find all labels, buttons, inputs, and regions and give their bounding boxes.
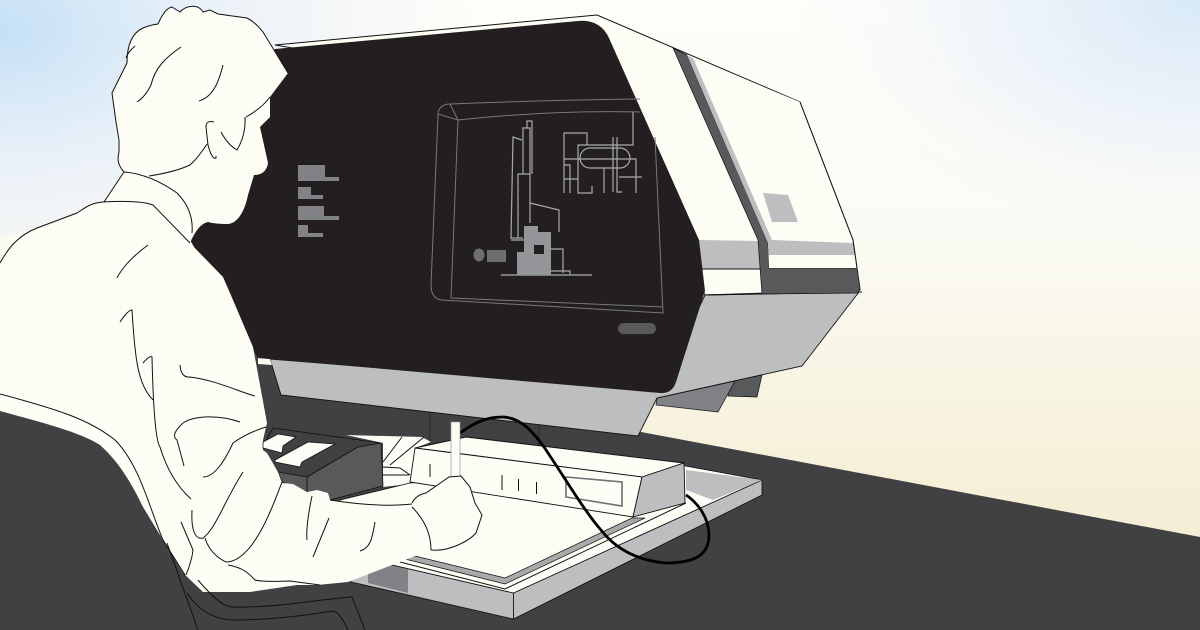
hand and cuff [412, 476, 482, 550]
indicator pill [618, 323, 656, 334]
vent square [763, 193, 798, 222]
tablet left face [340, 553, 514, 619]
outline head [112, 6, 288, 172]
stylus [451, 422, 460, 478]
silhouette [0, 6, 482, 592]
chair lines [187, 580, 365, 630]
tablet right face [514, 480, 762, 619]
behind shoulder [0, 231, 25, 263]
tablet top [340, 465, 762, 593]
housing underside [270, 292, 859, 436]
machine block [517, 226, 551, 275]
back edge and sleeve [0, 394, 198, 630]
pipework schematic [580, 148, 630, 168]
screen [190, 21, 705, 393]
arm outline [330, 500, 412, 505]
tablet rear grey corner [686, 470, 762, 500]
divider stripe [673, 48, 860, 294]
lower fins under monitor [656, 375, 762, 412]
key 2 [275, 442, 335, 467]
monitor stand column [430, 410, 539, 450]
monitor housing [258, 15, 862, 436]
tall schematic lines [511, 121, 559, 240]
white worksurface behind console [346, 435, 431, 487]
console tick marks [430, 464, 536, 494]
hair strands [126, 46, 270, 117]
shirt creases [117, 245, 375, 585]
console box [410, 437, 685, 517]
keyboard unit [262, 428, 383, 500]
digitizing tablet [340, 465, 762, 619]
band grey left [699, 240, 760, 269]
key 1 [263, 434, 296, 453]
desk surface [0, 350, 1200, 630]
console display outline [566, 477, 622, 506]
side parts [474, 248, 484, 262]
bezel lines on screen [431, 99, 663, 313]
ear and sideburn [206, 117, 245, 158]
man [0, 6, 482, 630]
stylus cable [460, 417, 709, 563]
menu blocks [298, 165, 339, 237]
paper inset band [405, 518, 645, 584]
housing top and front panel [275, 15, 860, 295]
right cover panel [687, 55, 857, 268]
light grey trim [687, 55, 855, 255]
screen drawing [474, 112, 642, 275]
jaw and collar [0, 144, 207, 263]
